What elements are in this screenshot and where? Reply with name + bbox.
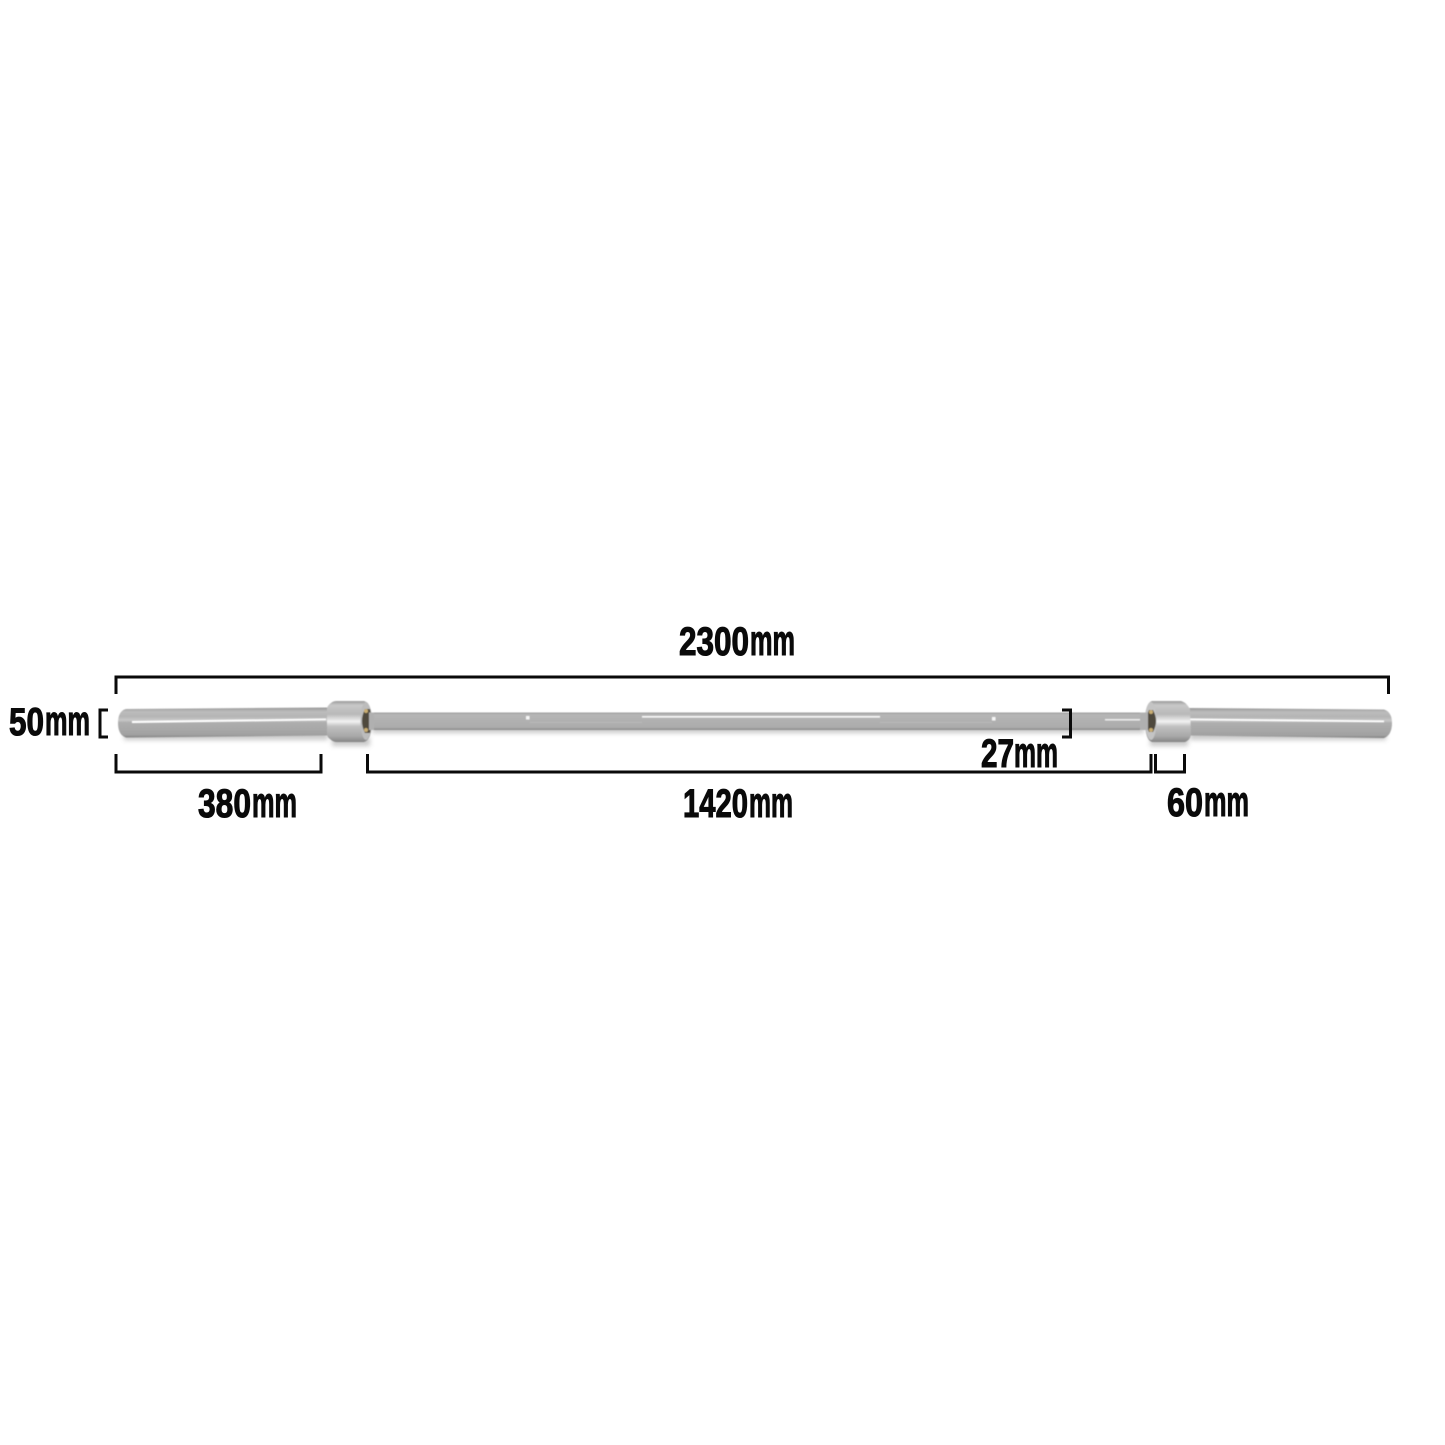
- knurl marks: [526, 716, 530, 720]
- bracket: overall length 2300mm: [116, 677, 1388, 694]
- bracket: shaft length 1420mm: [368, 754, 1151, 772]
- bracket: collar width 60mm: [1156, 754, 1184, 772]
- label: 50mm: [9, 697, 90, 744]
- label: 50mm: mm: [45, 697, 90, 744]
- shaft: [366, 712, 1150, 730]
- label: 380mm: [198, 779, 297, 827]
- label: 60mm: [1167, 778, 1249, 826]
- bracket: sleeve diameter 50mm: [100, 710, 108, 737]
- label: 27mm: 27: [981, 732, 1014, 776]
- label: 27mm: [981, 729, 1058, 777]
- label: 2300mm: mm: [750, 617, 795, 665]
- label: 1420mm: 1420: [683, 782, 748, 826]
- right collar: [1140, 701, 1191, 742]
- left collar: [327, 701, 374, 742]
- sleeve highlight: [1190, 718, 1384, 722]
- shaft highlights: [642, 716, 880, 718]
- label: 60mm: mm: [1204, 778, 1249, 826]
- label: 27mm: mm: [1014, 729, 1058, 777]
- label: 2300mm: 2300: [679, 620, 749, 664]
- bracket: sleeve length 380mm: [116, 754, 321, 772]
- label: 60mm: 60: [1167, 781, 1203, 825]
- barbell: [118, 701, 1392, 746]
- label: 380mm: 380: [198, 782, 251, 826]
- left sleeve: [118, 708, 328, 738]
- sleeve highlight: [132, 718, 326, 723]
- right sleeve: [1188, 708, 1392, 738]
- soft shadow: [124, 727, 1386, 746]
- label: 1420mm: mm: [749, 779, 793, 827]
- bracket: shaft diameter 27mm: [1062, 710, 1070, 737]
- label: 380mm: mm: [252, 779, 297, 827]
- label: 50mm: 50: [9, 701, 44, 744]
